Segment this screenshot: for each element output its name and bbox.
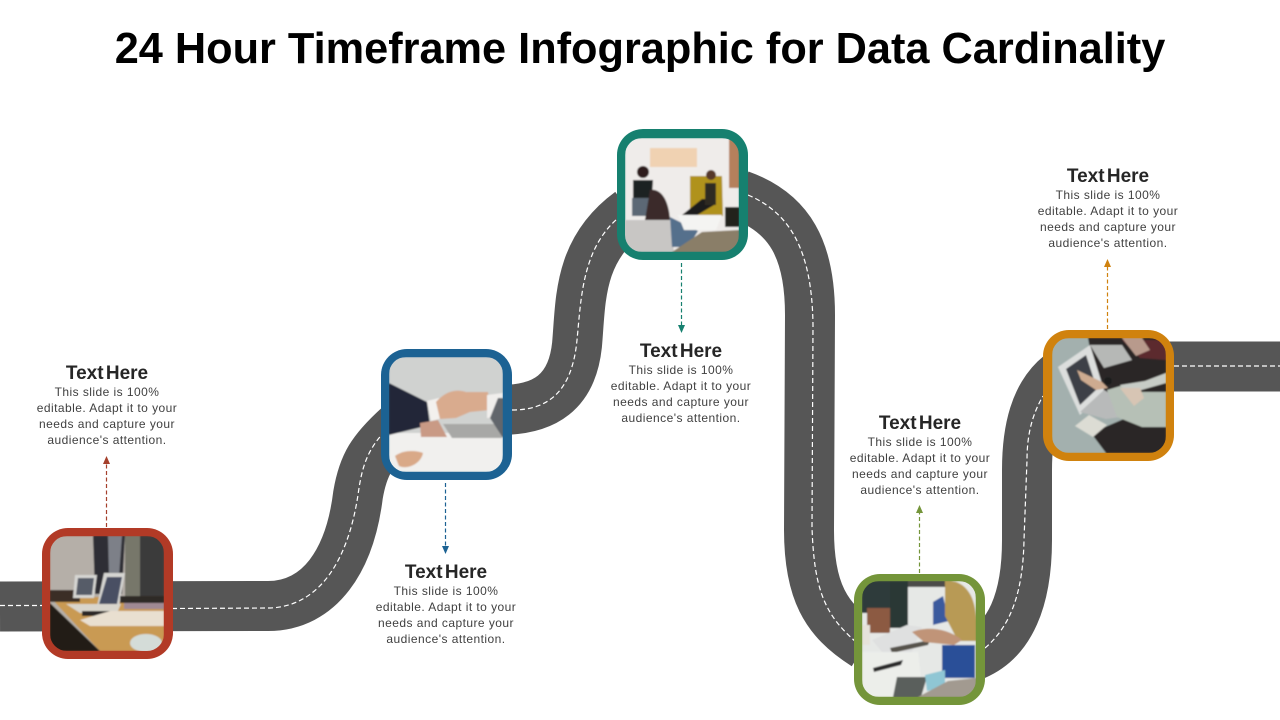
text block 1: audience's attention.	[47, 433, 167, 447]
text block 1: editable. Adapt it to your	[37, 401, 177, 415]
arrow: orange dashed up	[1104, 259, 1111, 329]
winding road graphic	[0, 129, 1280, 705]
text block 2: This slide is 100%	[394, 584, 498, 598]
text block 3: needs and capture your	[613, 395, 749, 409]
text block 1: needs and capture your	[39, 417, 175, 431]
text block 1: Text Here	[66, 363, 148, 384]
text block 3: This slide is 100%	[629, 363, 733, 377]
arrow: green dashed down	[678, 263, 685, 333]
road surface	[0, 195, 1280, 655]
title: 24 Hour Timeframe Infographic for Data Cardinality	[115, 25, 1165, 73]
text block 1	[37, 363, 177, 447]
text block 4: editable. Adapt it to your	[850, 451, 990, 465]
text block 3	[611, 341, 751, 425]
arrow: blue dashed down	[442, 483, 449, 554]
text block 4: needs and capture your	[852, 467, 988, 481]
milestone card 3: green photo frame	[617, 129, 748, 260]
text block 3: Text Here	[640, 341, 722, 362]
milestone card 2: blue photo frame	[381, 349, 512, 480]
text block 5: Text Here	[1067, 166, 1149, 187]
text block 5: needs and capture your	[1040, 220, 1176, 234]
text block 3: audience's attention.	[621, 411, 741, 425]
milestone card 1: red photo frame	[42, 528, 173, 659]
text block 5: audience's attention.	[1048, 236, 1168, 250]
arrow: olive dashed up	[916, 505, 923, 573]
text block 4: Text Here	[879, 413, 961, 434]
text block 4: audience's attention.	[860, 483, 980, 497]
text block 1: This slide is 100%	[55, 385, 159, 399]
text block 2: audience's attention.	[386, 632, 506, 646]
milestone card 4: olive photo frame	[854, 574, 985, 705]
text block 2	[376, 562, 516, 646]
text block 5	[1038, 166, 1178, 250]
text block 3: editable. Adapt it to your	[611, 379, 751, 393]
road centre dashes	[0, 195, 1280, 648]
text block 5: editable. Adapt it to your	[1038, 204, 1178, 218]
text block 5: This slide is 100%	[1056, 188, 1160, 202]
arrow: red dashed up	[103, 456, 110, 527]
text block 2: editable. Adapt it to your	[376, 600, 516, 614]
text block 2: Text Here	[405, 562, 487, 583]
text block 4: This slide is 100%	[868, 435, 972, 449]
text block 4	[850, 413, 990, 497]
text block 2: needs and capture your	[378, 616, 514, 630]
milestone card 5: orange photo frame	[1043, 330, 1174, 461]
